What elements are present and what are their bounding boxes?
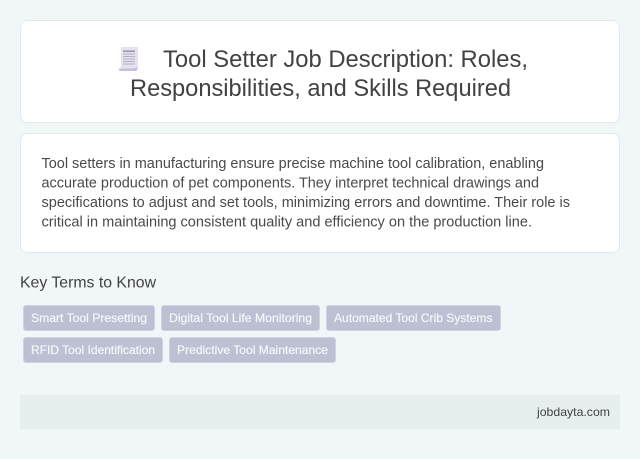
tag: digital tool life monitoring: Digital Tool Life Monitoring: [169, 311, 312, 325]
panel: title card: [20, 20, 620, 122]
text block: description: accurate production of pet components. They interpret technical drawings and: [42, 176, 539, 192]
text block: description: critical in maintaining consistent quality and efficiency on the production line.: [42, 214, 532, 230]
panel: description card: [20, 134, 620, 252]
tag list: key terms: [24, 306, 500, 362]
footer bar: [20, 395, 620, 429]
tag: predictive tool maintenance: Predictive Tool Maintenance: [177, 343, 328, 357]
text block: description: Tool setters in manufacturing ensure precise machine tool calibration, enabling: [42, 156, 544, 172]
tag: automated tool crib systems: Automated Tool Crib Systems: [334, 311, 492, 325]
footer bar: jobdayta.com: [536, 405, 610, 419]
tag: smart tool presetting: [24, 306, 154, 330]
tag: automated tool crib systems: [326, 306, 500, 330]
text block: description: [42, 156, 570, 230]
tag: digital tool life monitoring: [162, 306, 320, 330]
tag: predictive tool maintenance: [170, 338, 336, 362]
tag: smart tool presetting: Smart Tool Presetting: [31, 311, 147, 325]
text block: description: specifications to adjust and set tools, minimizing errors and downtime. Their role is: [42, 195, 570, 211]
heading: key terms: Key Terms to Know: [20, 274, 156, 292]
title: Responsibilities, and Skills Required: [130, 75, 511, 102]
tag: rfid tool identification: RFID Tool Identification: [31, 343, 155, 357]
title: Tool Setter Job Description: Roles,: [163, 46, 528, 73]
icon: paper receipt scroll: [118, 47, 138, 71]
title: [130, 46, 528, 102]
tag: rfid tool identification: [24, 338, 162, 362]
